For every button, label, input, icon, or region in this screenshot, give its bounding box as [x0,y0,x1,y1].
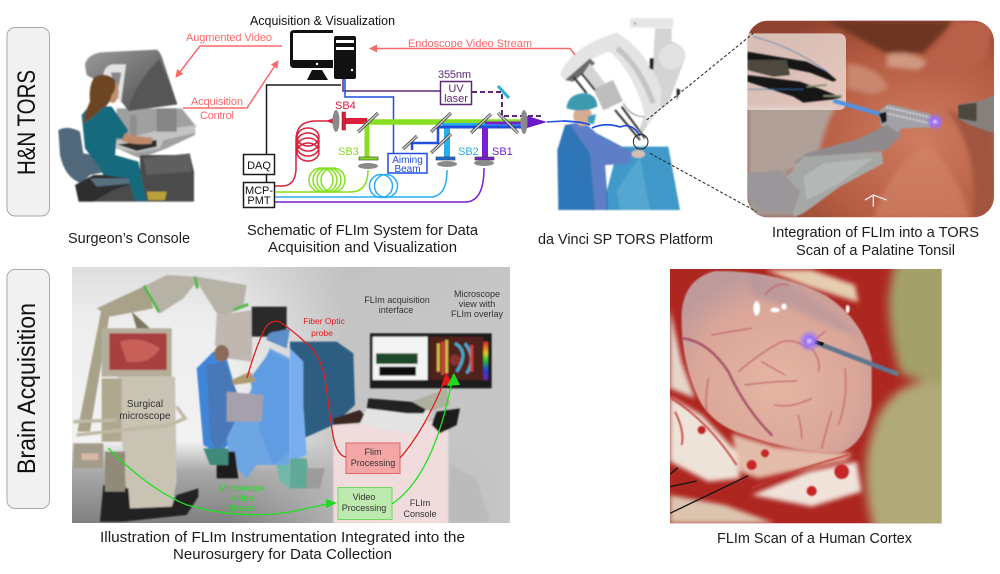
suction tools (out of focus) [860,269,942,524]
box: MCP-PMT: PMT [247,195,271,207]
icon: computer monitor and tower [290,30,356,80]
video processing box [338,488,392,520]
brain panel labels: Microscope [454,289,500,299]
photo panel: neurosurgery instrumentation [72,267,510,523]
tonsil scan panel [633,21,994,217]
fibre entering da Vinci platform [563,121,640,136]
labels: spectral bands: SB2 [458,146,479,158]
brain panel labels: microscope [119,411,171,422]
filters and lenses [332,110,528,169]
brain panel labels: Video [353,492,375,502]
brain panel labels: FLIm overlay [451,309,504,319]
box: DAQ [244,154,274,174]
arrow: augmented video [176,32,282,77]
sutures [670,468,748,513]
brain panel labels: probe [311,328,333,338]
brain panel labels: Stream [227,503,257,513]
brain panel labels: Processing [342,503,386,513]
collimated beam paths [326,92,563,157]
caption: neurosurgery illustration: Neurosurgery for Data Collection [173,546,392,563]
label tag: Brain Acquisition: Brain Acquisition [13,303,41,474]
caption: surgeon's console: Surgeon’s Console [68,230,190,247]
label tag: Brain Acquisition [7,270,50,508]
surgical team [197,352,237,453]
curve: fibre optic probe [247,321,346,457]
brain panel labels: Processing [351,458,395,468]
FLIm console and monitors [290,333,492,523]
caption: tonsil: Integration of FLIm into a TORS [772,224,979,241]
arrow: acquisition control [183,61,278,122]
brain panel labels [119,289,504,519]
brain panel labels: view with [459,299,495,309]
surgical microscope [73,275,290,522]
inset: instrument close-up [740,33,846,110]
caption: neurosurgery illustration [100,529,465,563]
arrow: acquisition control: Acquisition [191,96,243,108]
brain panel labels: FLIm acquisition [364,295,430,305]
photo: da Vinci SP TORS platform [557,18,685,210]
blood vessels [683,284,846,448]
label tag: H&N TORS: H&N TORS [13,70,41,175]
photo: surgeon's console [58,50,197,202]
caption: tonsil: Scan of a Palatine Tonsil [796,242,955,259]
labels: spectral bands: SB1 [492,146,513,158]
brain panel labels: interface [379,305,413,315]
box: aiming beam: Aiming [392,155,423,166]
box: DAQ: DAQ [247,160,271,172]
schematic: FLIm system [244,13,563,208]
brain panel labels: Fiber Optic [303,316,346,326]
caption: schematic [247,222,479,256]
heading: Acquisition & Visualization: Acquisition & Visualization [250,13,395,28]
brain panel labels: Surgical [127,399,163,410]
labels: spectral bands [335,100,513,158]
curve: FLIm to monitor [400,375,447,458]
curve: video to monitor [392,375,453,504]
glare highlights [753,301,850,316]
caption: da Vinci: da Vinci SP TORS Platform [538,231,713,248]
caption: neurosurgery illustration: Illustration of FLIm Instrumentation Integrated into the [100,529,465,546]
photo: tonsil tissue [740,21,994,217]
fibres and coils [275,121,484,202]
caption: schematic: Schematic of FLIm System for Data [247,222,479,239]
box: aiming beam [388,154,427,175]
arrow: augmented video: Augmented Video [186,32,272,44]
brain panel labels: Flim [364,447,382,457]
captions: top row [68,222,979,259]
captions: bottom row [100,529,912,563]
curve: microscope video stream [108,448,332,515]
brain panel labels: Console [403,509,437,519]
arrow: endoscope video stream: Endoscope Video Stream [408,38,532,50]
box: UV laser: UV [448,83,464,95]
label: 355nm: 355nm [438,69,471,81]
labels: spectral bands: SB4 [335,100,356,112]
photo: FLIm scan of a human cortex [670,269,942,524]
cortex surface [682,271,872,453]
box: aiming beam: Beam [394,164,421,175]
brain panel labels: FLIm [410,498,430,508]
wristed surgical tool [747,95,994,217]
caption: cortex scan: FLIm Scan of a Human Cortex [717,530,912,547]
flim processing box [346,443,400,474]
arrow: endoscope video stream [370,38,575,55]
label tag: H&N TORS [7,28,50,216]
icon: FLIm probe and glow [798,330,898,374]
labels: spectral bands: SB3 [338,146,359,158]
caption: tonsil [772,224,979,259]
mirrors [358,86,518,153]
brain panel labels: Microscope [219,483,265,493]
caption: schematic: Acquisition and Visualization [268,239,457,256]
icon: fibre optic probe [833,101,883,115]
brain panel labels: Video [231,493,253,503]
arrow: acquisition control: Control [200,110,234,122]
box: MCP-PMT: MCP- [245,185,273,197]
connector lines from computer [266,79,440,182]
box: UV laser [440,82,472,105]
red vessels in dura [672,398,849,496]
box: MCP-PMT [244,182,274,208]
box: UV laser: laser [444,93,468,105]
icon: UV excitation glow [926,112,944,131]
